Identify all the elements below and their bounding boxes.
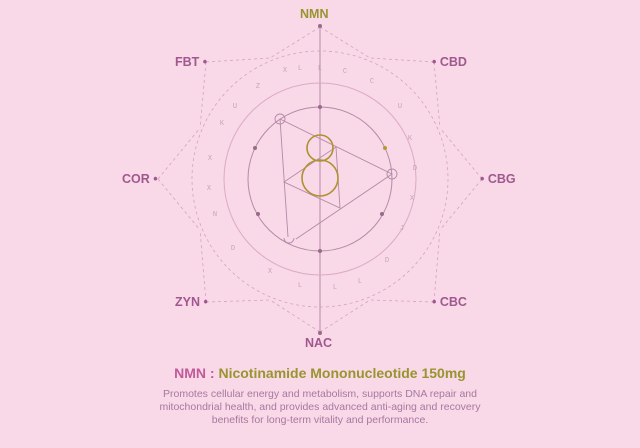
letter ring: K — [408, 135, 413, 143]
label NMN: NMN — [300, 7, 328, 21]
icon: figure 8 — [302, 135, 338, 196]
letter ring: L — [298, 282, 302, 290]
heading: NMN : Nicotinamide Mononucleotide 150mg — [174, 365, 466, 381]
letter ring: L — [318, 65, 322, 73]
letter ring: D — [413, 165, 417, 173]
letter ring: L — [333, 284, 337, 292]
letter ring: C — [343, 68, 347, 76]
label CBD: • CBD — [432, 55, 467, 69]
letter ring: X — [208, 155, 213, 163]
letter ring: C — [370, 78, 374, 86]
star dashed lines — [158, 27, 482, 332]
label NAC: NAC — [305, 336, 332, 350]
letter ring: Z — [256, 83, 260, 91]
triangles — [275, 114, 397, 243]
dots on circle — [253, 24, 384, 335]
letter ring: J — [400, 225, 404, 233]
letter ring: L — [298, 65, 302, 73]
description: Promotes cellular energy and metabolism, supports DNA repair and mitochondrial health, and provides advanced anti-aging and recovery benefits for long-term vitality and performance. — [159, 388, 481, 426]
vertical axis — [319, 24, 321, 332]
letter ring: X — [410, 195, 415, 203]
letter ring: N — [213, 211, 217, 219]
letter ring: K — [220, 120, 225, 128]
letter ring: D — [385, 257, 389, 265]
letter ring: U — [398, 103, 402, 111]
label FBT: FBT • — [175, 55, 207, 69]
letter ring: X — [268, 268, 273, 276]
letter ring: X — [207, 185, 212, 193]
circles — [224, 83, 416, 275]
label CBG: • CBG — [480, 172, 516, 186]
letter ring: L — [358, 278, 362, 286]
letter ring: X — [283, 67, 288, 75]
label CBC: • CBC — [432, 295, 467, 309]
letter ring — [207, 65, 417, 292]
letter ring: U — [233, 103, 237, 111]
label COR: COR • — [122, 172, 158, 186]
label ZYN: ZYN • — [175, 295, 208, 309]
letter ring: D — [231, 245, 235, 253]
